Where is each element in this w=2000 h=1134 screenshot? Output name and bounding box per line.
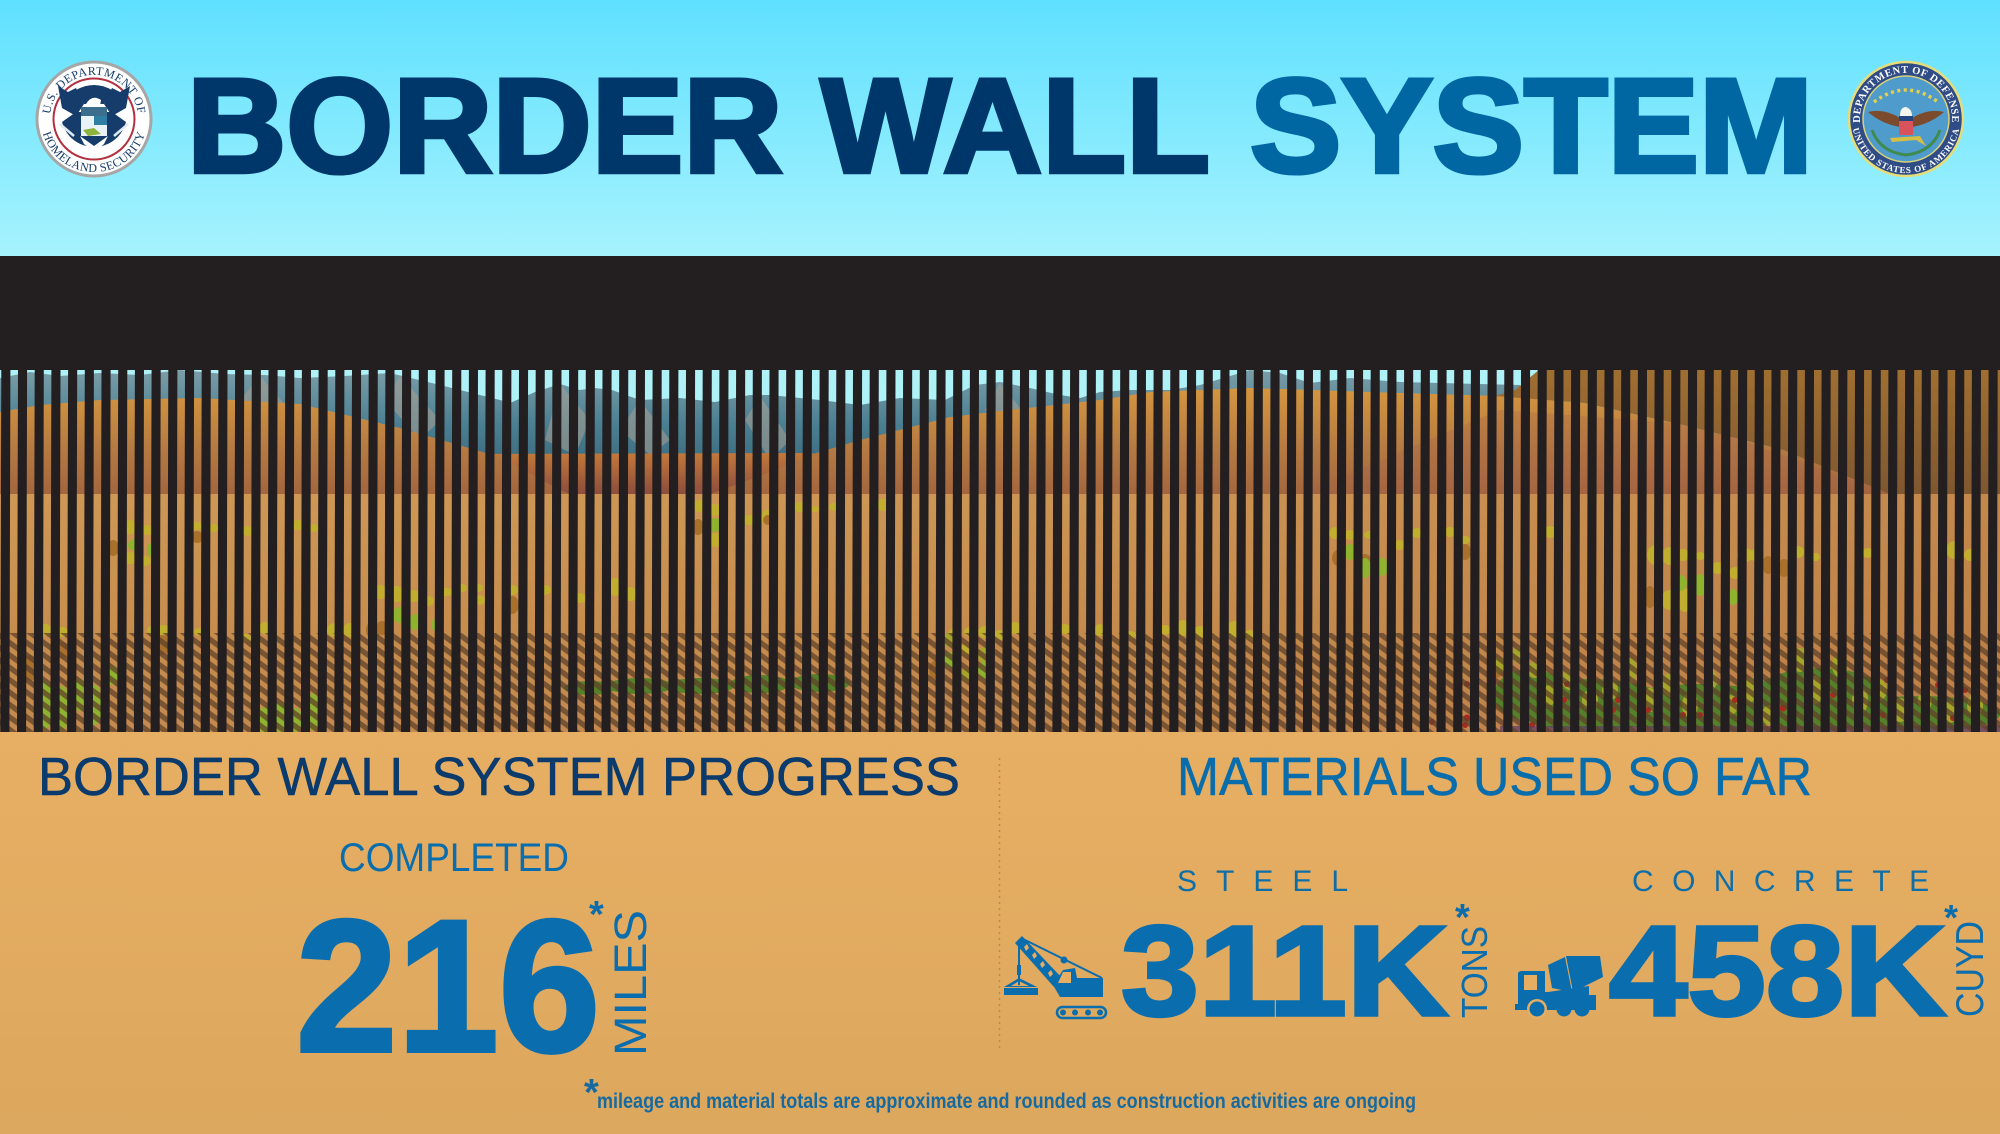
stat: miles completed: MILES [605,910,656,1056]
border wall scene [0,256,2000,733]
seal: Department of Defense: UNITED STATES OF AMERICA [1853,127,1959,174]
icon: concrete mixer truck [1515,956,1603,1019]
title: SYSTEM [1250,52,1813,201]
right dune [710,388,1892,494]
stat: concrete: CUYD [1949,921,1992,1017]
vegetation: shrubs [22,499,2000,733]
stat: miles completed: COMPLETED [339,836,569,880]
stat: concrete [1515,865,1992,1043]
left dune [0,398,570,494]
stat: concrete: CONCRETE [1632,865,1948,898]
stat: miles completed: 216 [296,881,600,1091]
stat: steel: * [1455,897,1470,939]
stat: miles completed: * [589,894,604,936]
seal: Department of Defense [1848,60,1964,178]
footnote: * [584,1072,599,1114]
stat: steel [1004,865,1495,1043]
dark foreground hill [1495,369,2000,494]
middle reddish hills [450,453,900,494]
seal: Department of Homeland Security [36,60,152,178]
title [187,52,1813,201]
wall shadow stripes [0,633,2000,732]
stat: steel: STEEL [1177,865,1367,898]
footnote: mileage and material totals are approximate and rounded as construction activities are ongoing [597,1090,1416,1113]
heading: materials: MATERIALS USED SO FAR [1177,747,1812,807]
header sky band [0,0,2000,256]
distant mountains [0,370,1520,480]
seal: Department of Defense: DEPARTMENT OF DEFENSE [1853,66,1959,123]
heading: progress: BORDER WALL SYSTEM PROGRESS [38,747,960,807]
wall top beam [0,256,2000,370]
stat: concrete: 458K [1609,900,1946,1043]
seal: Department of Homeland Security: U.S. DEPARTMENT OF [42,66,146,113]
desert sky [0,369,2000,499]
seal: Department of Homeland Security: HOMELAND SECURITY [42,131,144,172]
bottom statistics panel [0,732,2000,1134]
stat: concrete: * [1944,897,1958,938]
divider [998,758,1000,1048]
stat: steel: TONS [1454,926,1495,1018]
steel bollard wall [0,369,1998,732]
footnote [584,1072,1416,1114]
stat: steel: 311K [1121,900,1448,1043]
desert floor [0,494,2000,732]
icon: crane [1004,936,1106,1018]
title: BORDER WALL [187,52,1210,201]
